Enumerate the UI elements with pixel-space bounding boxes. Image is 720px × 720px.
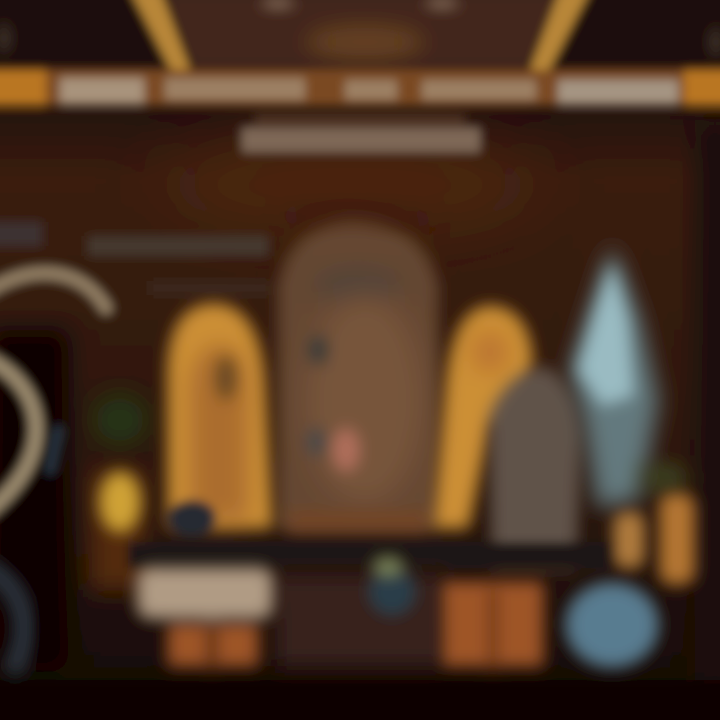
- floor: [275, 574, 445, 666]
- right orange legs: [443, 582, 543, 670]
- wall text left: [0, 222, 268, 295]
- centre blue object: [368, 557, 416, 616]
- right candles: [614, 494, 694, 584]
- bottom floor band: [0, 682, 720, 720]
- dark table bar: [128, 500, 612, 568]
- left candle: [90, 470, 146, 590]
- left plant: [90, 392, 150, 448]
- ceiling: [0, 0, 720, 70]
- central panel: [278, 205, 438, 532]
- cream sofa: [138, 568, 272, 670]
- back wall: [0, 110, 720, 680]
- left curved rings: [0, 273, 106, 665]
- blue bowl: [566, 583, 658, 667]
- title band: [0, 70, 720, 106]
- gold ceiling beams: [130, 0, 590, 72]
- grey standing figure: [490, 368, 580, 568]
- blue crystal: [570, 245, 658, 508]
- right arch: [434, 306, 532, 528]
- left arch: [168, 304, 272, 528]
- right plant: [641, 464, 689, 492]
- subtitle band: [242, 114, 480, 152]
- left dark recess: [0, 330, 68, 670]
